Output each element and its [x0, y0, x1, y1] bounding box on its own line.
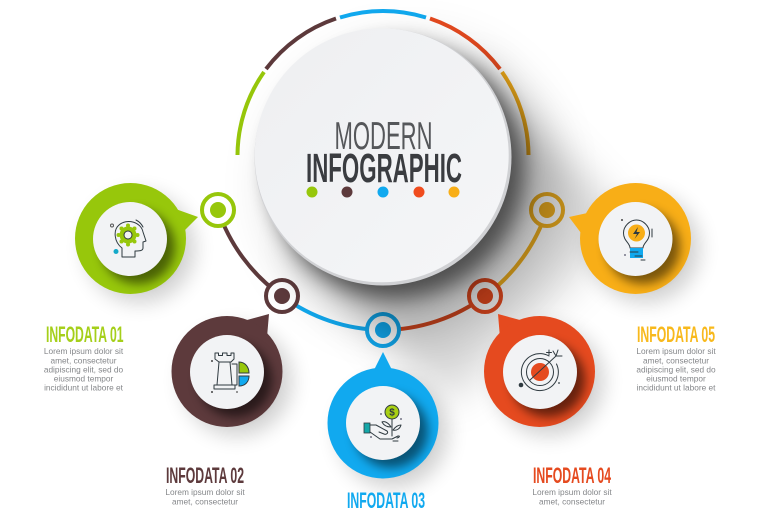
text block: infodata 01: incididunt ut labore et	[44, 382, 124, 392]
icon: light bulb	[621, 219, 652, 260]
outer segmented arc	[238, 11, 528, 155]
text block: infodata 01	[44, 322, 124, 392]
text block: infodata 02	[165, 463, 245, 506]
text block: infodata 02: INFODATA 02	[166, 463, 244, 488]
node: brown	[266, 280, 298, 312]
text block: infodata 05	[636, 322, 716, 392]
panel: step 3	[328, 352, 448, 488]
main circle	[254, 28, 512, 286]
text block: infodata 05: adipiscing elit, sed do	[636, 364, 716, 374]
node: red	[469, 280, 501, 312]
text block: infodata 01: eiusmod tempor	[54, 374, 113, 384]
text block: infodata 04: amet, consectetur	[539, 496, 605, 506]
node: orange	[531, 194, 563, 226]
title	[306, 115, 462, 191]
text block: infodata 01: INFODATA 01	[46, 322, 124, 347]
icon: chess rook and pie	[211, 353, 249, 393]
text block: infodata 01: adipiscing elit, sed do	[44, 364, 124, 374]
panel: step 2	[172, 314, 292, 436]
text block: infodata 05: amet, consectetur	[643, 356, 709, 366]
node: green	[202, 194, 234, 226]
panel: step 4	[484, 314, 604, 436]
text block: infodata 04	[532, 463, 612, 506]
text block: infodata 01: amet, consectetur	[51, 356, 117, 366]
text block: infodata 02: Lorem ipsum dolor sit	[165, 487, 245, 497]
text block: infodata 04: Lorem ipsum dolor sit	[532, 487, 612, 497]
icon: target with arrow	[519, 350, 562, 391]
text block: infodata 05: eiusmod tempor	[646, 374, 706, 384]
title: MODERN	[334, 115, 432, 158]
icon: hand with money plant: $	[389, 408, 395, 418]
connector curve	[218, 210, 547, 330]
colour dots	[306, 186, 460, 198]
text block: infodata 04: INFODATA 04	[533, 463, 611, 488]
main circle shadow	[268, 42, 630, 404]
icon: head with gear	[110, 220, 146, 257]
node: blue	[367, 314, 399, 346]
panel: step 5	[569, 183, 700, 303]
panel: step 1	[75, 183, 198, 303]
title: INFOGRAPHIC	[306, 145, 462, 191]
text block: infodata 02: amet, consectetur	[172, 496, 238, 506]
text block: infodata 05: Lorem ipsum dolor sit	[636, 346, 716, 356]
text block: infodata 05: incididunt ut labore et	[637, 382, 716, 392]
text block: infodata 01: Lorem ipsum dolor sit	[44, 346, 124, 356]
